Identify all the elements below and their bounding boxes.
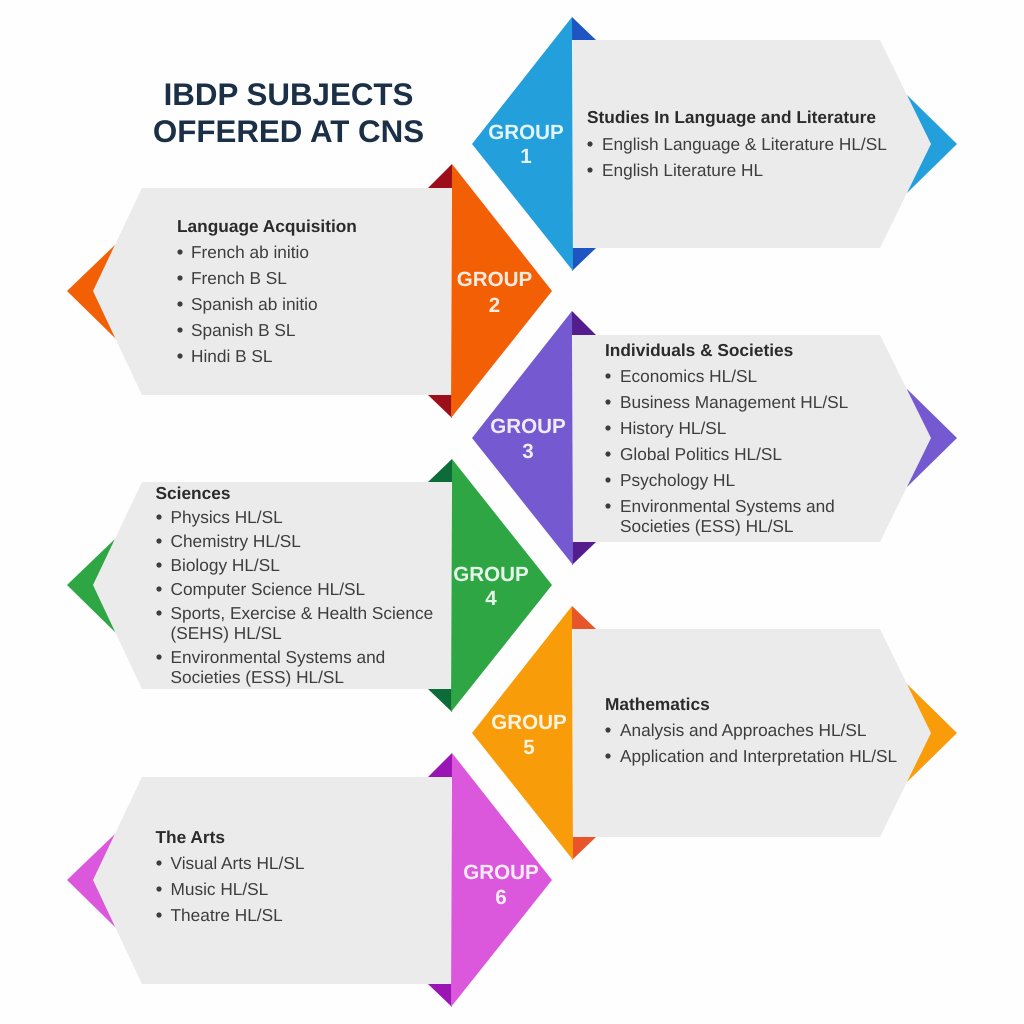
text: Language Acquisition: Spanish ab initio xyxy=(191,294,318,314)
text: Sciences: Sciences xyxy=(156,483,230,503)
text: Sciences xyxy=(156,483,433,687)
icon: group 4 diamond marker: 4 xyxy=(485,587,497,610)
text: Mathematics: Mathematics xyxy=(605,694,710,714)
icon: group 6 diamond marker: 6 xyxy=(495,886,507,909)
text: Individuals & Societies: Psychology HL xyxy=(620,470,735,490)
icon: group 3 diamond marker: GROUP xyxy=(490,415,566,438)
text: Individuals & Societies: Societies (ESS) HL/SL xyxy=(620,516,794,536)
content card: group 5 xyxy=(573,629,931,837)
icon: group 3 diamond marker: 3 xyxy=(522,440,534,463)
icon: group 2 diamond marker: GROUP xyxy=(457,268,533,291)
text: Sciences: Sports, Exercise & Health Science xyxy=(170,603,433,623)
text: Studies In Language and Literature: Studies In Language and Literature xyxy=(587,107,876,127)
text: Language Acquisition: French ab initio xyxy=(191,242,309,262)
text: Language Acquisition: French B SL xyxy=(191,268,287,288)
text: Individuals & Societies: Business Management HL/SL xyxy=(620,392,849,412)
icon: group 2 diamond marker xyxy=(428,164,552,418)
arrow: group 4 xyxy=(67,537,117,634)
text: Individuals & Societies xyxy=(605,340,849,536)
text: Language Acquisition: Hindi B SL xyxy=(191,346,273,366)
text: Sciences: Physics HL/SL xyxy=(170,507,283,527)
arrow: group 6 xyxy=(67,832,117,929)
text: The Arts: Music HL/SL xyxy=(170,879,269,899)
icon: group 3 diamond marker xyxy=(472,311,596,565)
text: Mathematics: Analysis and Approaches HL/SL xyxy=(620,720,867,740)
text: Sciences: Computer Science HL/SL xyxy=(170,579,366,599)
title xyxy=(153,77,424,149)
text: The Arts: Theatre HL/SL xyxy=(170,905,283,925)
text: Sciences: Biology HL/SL xyxy=(170,555,280,575)
arrow: group 1 xyxy=(907,95,957,193)
content card: group 2 xyxy=(93,188,451,395)
text: Sciences: Chemistry HL/SL xyxy=(170,531,301,551)
text: Individuals & Societies: History HL/SL xyxy=(620,418,727,438)
icon: group 6 diamond marker xyxy=(428,753,552,1007)
icon: group 6 diamond marker: GROUP xyxy=(463,861,539,884)
text: Mathematics: Application and Interpretation HL/SL xyxy=(620,746,898,766)
text: The Arts xyxy=(156,827,305,925)
arrow: group 2 xyxy=(67,243,117,340)
text: Language Acquisition xyxy=(177,216,357,366)
text: Language Acquisition: Spanish B SL xyxy=(191,320,296,340)
text: Studies In Language and Literature: English Language & Literature HL/SL xyxy=(602,134,887,154)
content card: group 3 xyxy=(573,335,931,542)
icon: group 4 diamond marker xyxy=(428,459,552,712)
text: Individuals & Societies: Individuals & Societies xyxy=(605,340,793,360)
text: Sciences: Environmental Systems and xyxy=(170,647,385,667)
content card: group 6 xyxy=(93,777,451,984)
panel: group 2 xyxy=(67,164,552,418)
panel: group 6 xyxy=(67,753,552,1007)
icon: group 1 diamond marker: 1 xyxy=(520,145,532,168)
text: Sciences: (SEHS) HL/SL xyxy=(170,623,282,643)
panel: group 1 xyxy=(472,17,957,271)
text: The Arts: The Arts xyxy=(156,827,225,847)
icon: group 5 diamond marker xyxy=(472,606,596,860)
content card: group 4 xyxy=(93,482,451,689)
icon: group 1 diamond marker: GROUP xyxy=(488,121,564,144)
icon: group 1 diamond marker xyxy=(472,17,596,271)
arrow: group 3 xyxy=(907,389,957,487)
text: Individuals & Societies: Global Politics HL/SL xyxy=(620,444,782,464)
arrow: group 5 xyxy=(907,684,957,782)
icon: group 5 diamond marker: 5 xyxy=(523,736,535,759)
panel: group 5 xyxy=(472,606,957,860)
text: The Arts: Visual Arts HL/SL xyxy=(170,853,305,873)
title: IBDP SUBJECTS xyxy=(164,77,413,112)
text: Studies In Language and Literature xyxy=(587,107,887,180)
title: OFFERED AT CNS xyxy=(153,114,424,149)
text: Individuals & Societies: Environmental Systems and xyxy=(620,496,835,516)
panel: group 4 xyxy=(67,459,552,712)
content card: group 1 xyxy=(573,40,931,248)
text: Individuals & Societies: Economics HL/SL xyxy=(620,366,758,386)
text: Sciences: Societies (ESS) HL/SL xyxy=(170,667,344,687)
icon: group 5 diamond marker: GROUP xyxy=(491,711,567,734)
icon: group 2 diamond marker: 2 xyxy=(489,294,500,317)
text: Language Acquisition: Language Acquisition xyxy=(177,216,357,236)
panel: group 3 xyxy=(472,311,957,565)
text: Mathematics xyxy=(605,694,898,766)
icon: group 4 diamond marker: GROUP xyxy=(453,563,529,586)
text: Studies In Language and Literature: English Literature HL xyxy=(602,160,763,180)
